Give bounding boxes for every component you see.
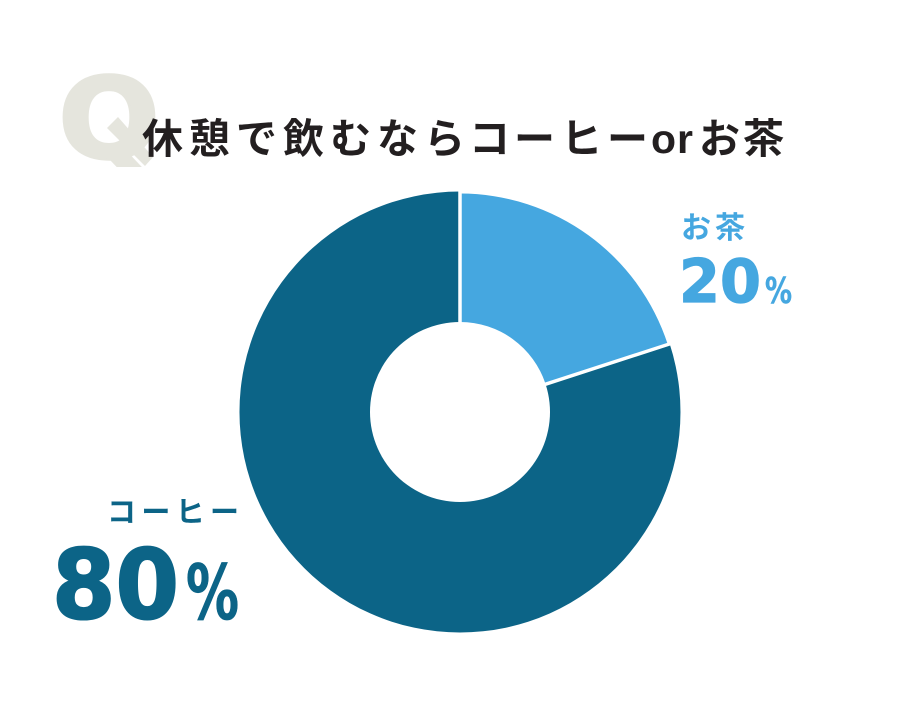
tea name: お茶 [681,212,749,245]
slice: coffee 80% [239,192,680,632]
Q letter backdrop [62,73,156,167]
label: coffee [52,497,239,641]
coffee name: コーヒー [107,497,239,529]
tea value: 20 [679,247,761,317]
coffee value: 80 [52,529,179,641]
slice: tea 20% [460,194,668,384]
tea percent sign: % [765,271,792,312]
donut chart [239,186,680,632]
coffee percent sign: % [186,548,239,637]
title: 休憩で飲むならコーヒーorお茶 [142,116,784,162]
label: tea [679,212,792,317]
infographic [56,73,792,632]
Q letter backdrop: Q [58,55,160,185]
